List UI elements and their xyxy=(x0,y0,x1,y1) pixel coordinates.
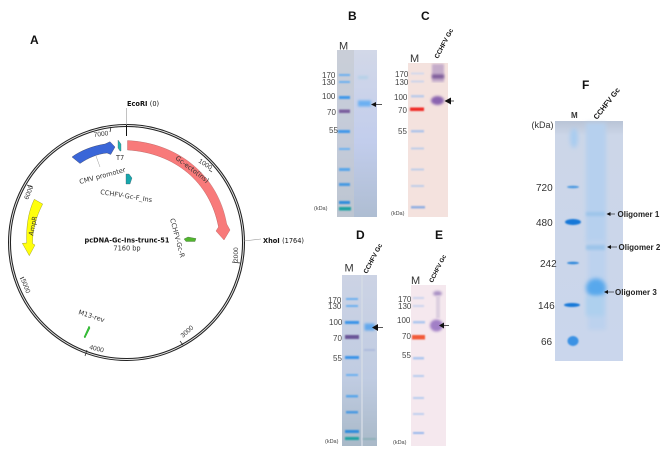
marker bands xyxy=(410,72,425,208)
heading B: B xyxy=(348,9,357,23)
size labels: 720 xyxy=(536,183,553,194)
feature: CCHFV-Gc-F_Ins primer xyxy=(100,174,153,204)
marker bands xyxy=(564,128,581,346)
callout: Oligomer 3: Oligomer 3 xyxy=(615,288,657,297)
size labels: 170 xyxy=(395,70,409,79)
feature: M13-rev xyxy=(77,308,106,338)
sample bands xyxy=(586,212,606,316)
scale ticks: 1000 xyxy=(197,158,213,172)
size labels: 130 xyxy=(398,302,412,311)
size labels: 146 xyxy=(538,301,555,312)
size labels: 100 xyxy=(397,316,411,325)
feature: CCHFV-Gc-R primer: CCHFV-Gc-R xyxy=(168,217,186,259)
size labels: 170 xyxy=(398,295,412,304)
heading F: F xyxy=(582,78,589,92)
EcoRI site label xyxy=(126,100,159,136)
lane marker M: M xyxy=(411,275,420,287)
size labels: 66 xyxy=(541,337,553,348)
sample bands xyxy=(430,291,443,332)
size labels xyxy=(391,70,409,217)
blot background xyxy=(411,285,446,446)
feature: CMV promoter arrow xyxy=(72,142,115,164)
panel D: gel xyxy=(325,228,384,446)
size labels xyxy=(314,71,338,212)
gel background xyxy=(337,50,377,217)
size labels: (kDa) xyxy=(393,440,407,446)
arrow xyxy=(444,98,454,104)
size labels: 55 xyxy=(329,126,338,135)
panel F: native gel xyxy=(532,78,661,361)
scale ticks: 6000 xyxy=(23,184,35,201)
scale ticks: 3000 xyxy=(180,324,195,339)
arrow xyxy=(439,322,449,328)
CMV promoter label: CMV promoter xyxy=(78,166,127,186)
Gc-ecto label: Gc-ecto(ins) xyxy=(174,154,211,185)
size labels: 100 xyxy=(394,93,408,102)
lane label: CCHFV Gc xyxy=(434,27,455,60)
sample bands xyxy=(363,324,376,440)
size labels: (kDa) xyxy=(325,439,339,445)
panel A: plasmid map xyxy=(10,33,304,360)
gel background xyxy=(342,275,377,446)
size labels: 55 xyxy=(398,127,407,136)
lane label: CCHFV Gc xyxy=(591,86,622,121)
lane label: CCHFV Gc xyxy=(429,254,448,284)
plasmid name: 7160 bp xyxy=(113,244,141,252)
heading C: C xyxy=(421,9,430,23)
size labels: 55 xyxy=(402,351,411,360)
arrow xyxy=(372,324,383,331)
lane label: CCHFV Gc xyxy=(363,242,384,275)
scale ticks xyxy=(19,127,240,356)
lane marker M: M xyxy=(410,53,419,65)
feature: T7 xyxy=(115,140,124,162)
size labels xyxy=(393,295,412,446)
size labels: 70 xyxy=(327,108,336,117)
size labels: 130 xyxy=(322,78,336,87)
panel E: western blot xyxy=(393,228,449,446)
size labels: 70 xyxy=(398,106,407,115)
scale ticks: 4000 xyxy=(89,344,105,355)
CMV promoter label xyxy=(78,156,127,186)
size labels: 130 xyxy=(328,302,342,311)
scale ticks: 7000 xyxy=(93,130,109,139)
feature: CCHFV-Gc-F_Ins primer: CCHFV-Gc-F_Ins xyxy=(100,188,153,204)
EcoRI site label: EcoRI (0) xyxy=(127,100,159,108)
feature: AmpR arrow xyxy=(22,199,43,256)
size labels xyxy=(532,120,557,348)
lane marker M: M xyxy=(571,111,578,120)
size labels: 100 xyxy=(329,318,343,327)
size labels: (kDa) xyxy=(532,120,554,130)
size labels: (kDa) xyxy=(391,211,405,217)
plasmid name: pcDNA-Gc-Ins-trunc-51 xyxy=(85,236,170,244)
marker bands xyxy=(345,298,359,440)
marker bands xyxy=(412,297,425,434)
callout: Oligomer 2: Oligomer 2 xyxy=(618,243,661,252)
size labels: 130 xyxy=(395,78,409,87)
panel B: gel xyxy=(314,9,382,217)
feature: AmpR arrow: AmpR xyxy=(27,215,39,236)
lane marker M: M xyxy=(344,262,354,274)
size labels: 70 xyxy=(333,334,342,343)
size labels: 170 xyxy=(322,71,336,80)
callout: Oligomer 1: Oligomer 1 xyxy=(618,210,660,219)
size labels: 170 xyxy=(328,296,342,305)
scale ticks: 5000 xyxy=(19,278,31,295)
feature: Gc-ecto(ins) arrow xyxy=(128,140,230,240)
sample bands xyxy=(431,64,444,105)
size labels: 242 xyxy=(540,259,557,270)
arrow xyxy=(371,102,382,107)
feature: M13-rev: M13-rev xyxy=(77,308,106,324)
size labels xyxy=(325,296,343,445)
lane marker M: M xyxy=(339,40,348,52)
panel C: western blot xyxy=(391,9,455,217)
gel background xyxy=(555,121,623,361)
blot background xyxy=(408,63,448,217)
heading E: E xyxy=(435,228,443,242)
feature: CCHFV-Gc-R primer xyxy=(168,217,196,259)
size labels: 70 xyxy=(402,332,411,341)
plasmid backbone xyxy=(10,126,244,360)
marker bands xyxy=(338,74,351,210)
XhoI site label xyxy=(244,237,304,245)
size labels: (kDa) xyxy=(314,206,328,212)
size labels: 100 xyxy=(322,92,336,101)
feature: T7: T7 xyxy=(115,154,124,162)
XhoI site label: XhoI (1764) xyxy=(263,237,304,245)
size labels: 480 xyxy=(536,218,553,229)
plasmid name xyxy=(85,236,170,252)
sample bands xyxy=(358,76,371,106)
heading D: D xyxy=(356,228,365,242)
size labels: 55 xyxy=(333,354,342,363)
heading A: A xyxy=(30,33,39,47)
scale ticks: 2000 xyxy=(233,247,240,262)
